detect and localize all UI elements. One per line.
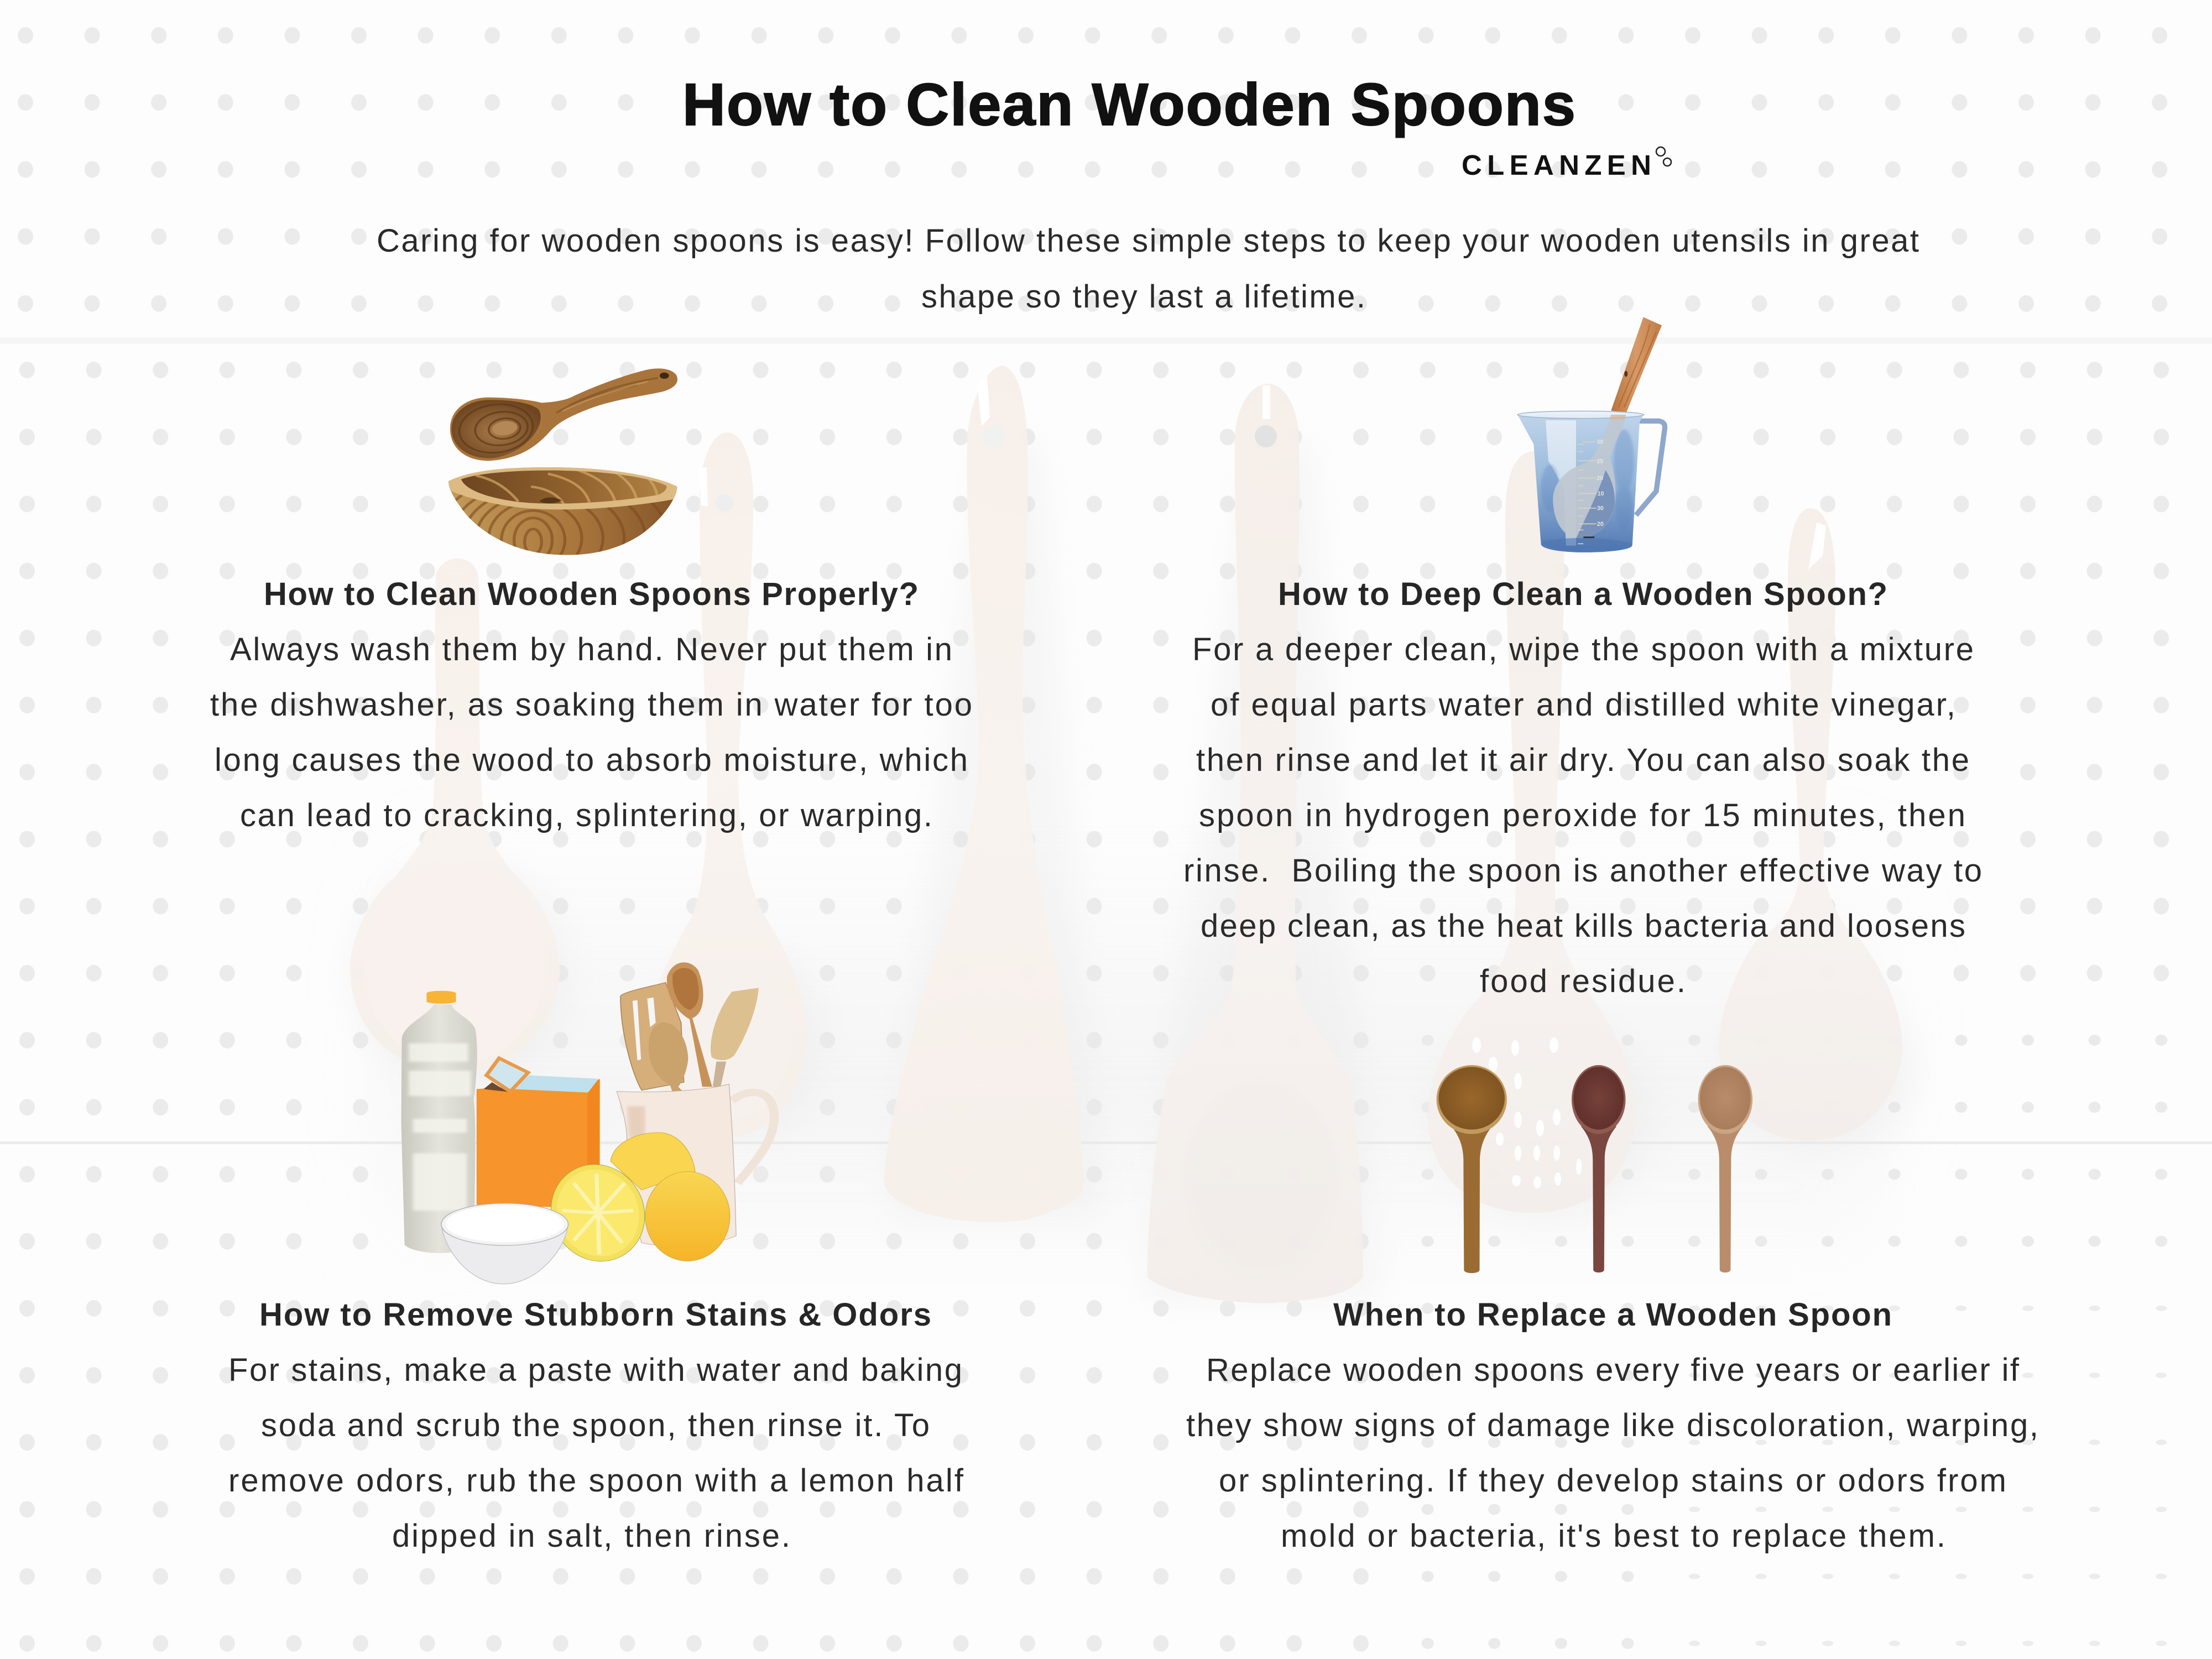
icon: measuring cup: 20 [1597,521,1604,528]
body text: or splintering. If they develop stains or odors from [1219,1463,2006,1499]
icon: utensils [620,962,759,1093]
spatula silhouette 3 [884,366,1084,1222]
icon: measuring cup [1517,411,1665,552]
body text: then rinse and let it air dry. You can also soak the [1196,742,1969,778]
spoon silhouette 2 [648,432,806,1137]
panel: when to replace [1186,1297,2038,1554]
panel: stubborn stains and odors [228,1297,964,1554]
heading: How to Deep Clean a Wooden Spoon? [1278,576,1887,612]
spoon silhouette 1 [350,559,560,1072]
spoon silhouette 6 [1719,508,1902,1141]
icon: spoon handle [1611,317,1662,413]
body text: spoon in hydrogen peroxide for 15 minutes, then [1199,797,1965,833]
illustration: cleaning supplies [401,962,774,1284]
heading: How to Remove Stubborn Stains & Odors [259,1297,931,1333]
icon: measuring cup: 30 [1597,505,1604,512]
slotted spoon silhouette 5 [1428,451,1636,1213]
body text: remove odors, rub the spoon with a lemon half [228,1463,964,1499]
body text [228,1352,964,1554]
icon: measuring cup: 25 [1597,458,1603,465]
body text: they show signs of damage like discoloration, warping, [1186,1407,2038,1443]
body text: can lead to cracking, splintering, or warping. [240,797,932,833]
body text [1183,632,1982,999]
body text: For a deeper clean, wipe the spoon with a mixture [1192,632,1974,667]
icon: baking soda box [477,1058,600,1208]
panel: how to deep clean [1183,576,1982,999]
body text: deep clean, as the heat kills bacteria and loosens [1201,908,1965,944]
body text [1186,1352,2038,1554]
icon: vinegar bottle [401,991,477,1253]
title: How to Clean Wooden Spoons [682,71,1575,138]
icon: dark oak spoon [1437,1065,1507,1273]
icon: ceramic pitcher [617,1084,774,1245]
illustration: wooden spoon and bowl [448,368,677,555]
body text: of equal parts water and distilled white vinegar, [1211,687,1955,723]
icon: walnut spoon [1572,1065,1626,1272]
body text: rinse. Boiling the spoon is another effective way to [1183,853,1982,889]
body text: long causes the wood to absorb moisture, which [215,742,968,778]
body text: food residue. [1480,963,1686,999]
icon: measuring cup: 30 [1597,439,1603,445]
intro text [377,223,1919,315]
body text: the dishwasher, as soaking them in water for too [210,687,972,723]
heading: How to Clean Wooden Spoons Properly? [264,576,919,612]
body text: mold or bacteria, it's best to replace them. [1281,1518,1945,1554]
icon: measuring cup: 10 [1598,491,1604,497]
icon: lemons [544,1133,730,1266]
illustration: three wooden spoons [1437,1065,1752,1273]
icon: bowl [448,467,677,555]
logo: CLEANZEN: CLEANZEN [1462,149,1651,181]
body text: soda and scrub the spoon, then rinse it. To [261,1407,930,1443]
background: faded hanging wooden utensils [350,366,1916,1303]
icon: spoon [450,368,677,461]
body text: Replace wooden spoons every five years or earlier if [1206,1352,2020,1388]
illustration: spoon in measuring cup [1517,317,1665,552]
icon: measuring cup: 20 [1597,475,1603,482]
heading: When to Replace a Wooden Spoon [1333,1297,1892,1333]
panel: how to clean properly [210,576,972,833]
icon: light spoon [1698,1065,1752,1272]
body text: For stains, make a paste with water and baking [228,1352,962,1388]
body text [210,632,972,833]
intro text: Caring for wooden spoons is easy! Follow these simple steps to keep your wooden utensils in great [377,223,1919,259]
body text: dipped in salt, then rinse. [392,1518,790,1554]
spatula silhouette 4 [1147,384,1363,1303]
icon: salt bowl [441,1203,568,1284]
body text: Always wash them by hand. Never put them in [230,632,952,667]
intro text: shape so they last a lifetime. [921,279,1365,315]
